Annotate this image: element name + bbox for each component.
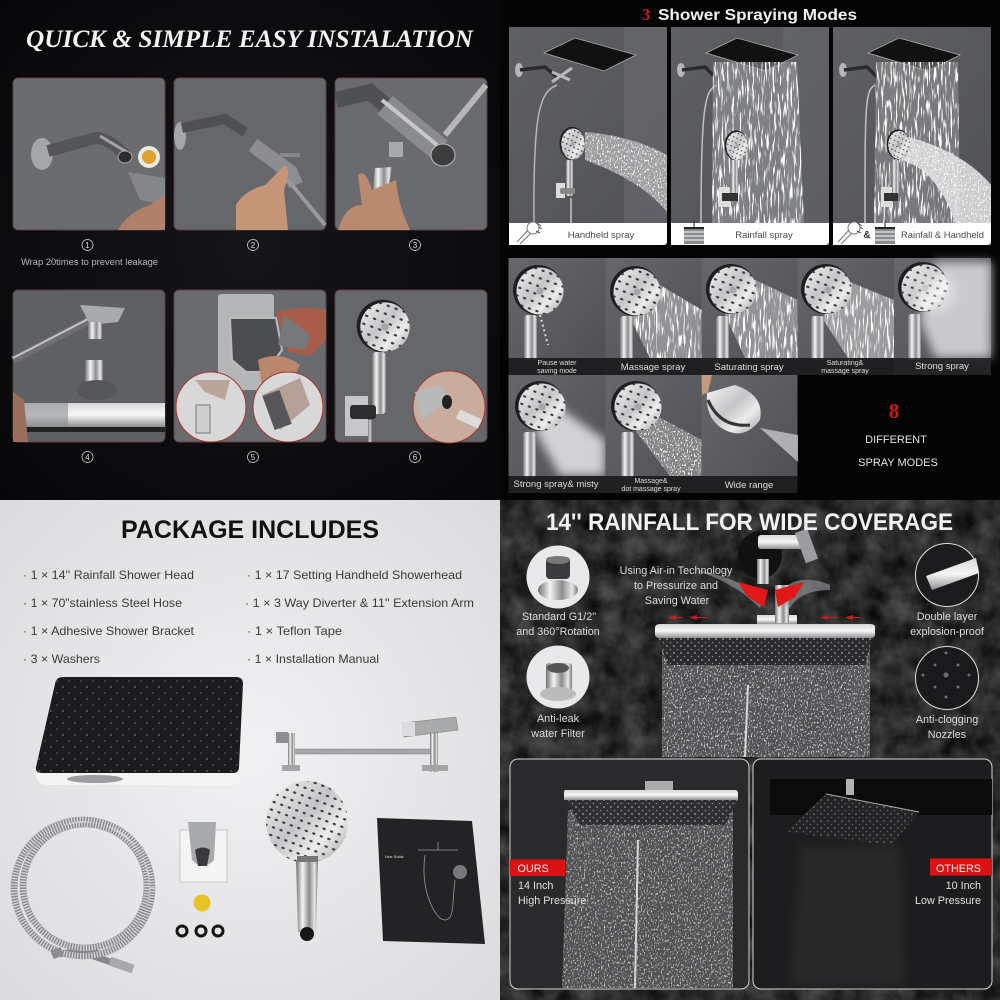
caption: handheld spray	[509, 222, 667, 245]
feature: water filter	[526, 646, 590, 740]
step 3 photo: connect hose	[335, 78, 487, 230]
panel: package includes	[0, 500, 500, 1000]
heading: 3 shower spraying modes: 3	[642, 5, 650, 24]
feature: water filter: Anti-leak	[537, 713, 580, 725]
list: left column: · 1 × Adhesive Shower Bracket	[23, 624, 195, 638]
list: right column: · 1 × Installation Manual	[247, 652, 379, 666]
callout: 8 different spray modes: 8	[889, 399, 899, 423]
caption: rainfall and handheld	[833, 221, 991, 245]
text: air-in technology: Using Air-in Technology	[620, 565, 733, 577]
step 1 number	[82, 240, 93, 250]
step 5 number	[248, 452, 258, 462]
caption: Strong spray& misty	[514, 479, 599, 490]
heading: 14 inch rainfall: 14'' RAINFALL FOR WIDE COVERAGE	[546, 509, 953, 536]
arrows: air flow left	[668, 615, 707, 620]
step 4 number	[82, 452, 93, 462]
inset: press bracket	[253, 372, 323, 442]
caption: Wide range	[725, 480, 773, 491]
caption: rainfall and handheld: Rainfall & Handheld	[901, 230, 984, 241]
step 5 number: 5	[251, 453, 256, 462]
step 2 number: 2	[251, 241, 256, 250]
text: 10 inch low pressure: 10 Inch	[946, 880, 981, 892]
step 3 number: 3	[413, 241, 418, 250]
comparison: ours	[510, 759, 749, 989]
badge: ours: OURS	[518, 863, 549, 875]
product: 14 inch rain shower head	[35, 677, 243, 785]
heading: package includes: PACKAGE INCLUDES	[121, 516, 379, 544]
feature: G1/2 connector: and 360°Rotation	[516, 626, 600, 638]
text: air-in technology: Saving Water	[645, 595, 710, 607]
arrows: air flow right	[820, 615, 860, 620]
step 6 number: 6	[413, 453, 418, 462]
feature: anti-clogging nozzles: Nozzles	[928, 729, 967, 741]
text: 14 inch high pressure	[518, 880, 586, 907]
spray mode: saturating	[702, 258, 798, 375]
step 1 number: 1	[85, 241, 90, 250]
caption	[508, 358, 606, 375]
feature: anti-clogging nozzles	[916, 646, 978, 741]
feature: water filter: water Filter	[530, 728, 585, 740]
step 4 photo: mount rain head	[13, 290, 165, 442]
product: instruction manual	[377, 818, 485, 944]
caption: Pause water	[538, 360, 577, 367]
list: left column	[23, 568, 195, 666]
callout: 8 different spray modes: DIFFERENT	[865, 434, 927, 446]
step 3 number	[410, 240, 420, 250]
caption: dot massage spray	[621, 486, 681, 493]
caption: Saturating&	[827, 360, 864, 367]
feature: double layer: Double layer	[917, 611, 978, 623]
step 2 photo: attach diverter	[174, 78, 326, 230]
product: adhesive bracket	[180, 822, 227, 882]
spray mode: saturating and massage	[798, 258, 894, 375]
panel: 14 inch rainfall wide coverage	[500, 500, 1000, 1000]
panel: quick and simple installation	[0, 0, 500, 500]
product: washers	[177, 926, 223, 936]
heading: 3 shower spraying modes: Shower Spraying Modes	[658, 7, 857, 24]
spray mode: pause water	[508, 258, 606, 375]
step 6 photo: handheld placed	[335, 290, 487, 443]
product: handheld shower head	[266, 781, 348, 941]
diverter with air inlet arrows	[695, 529, 830, 624]
list: left column: · 3 × Washers	[23, 652, 100, 666]
badge: others: OTHERS	[936, 863, 981, 875]
step 4 number: 4	[85, 453, 90, 462]
product: instruction manual: User Guide	[385, 855, 404, 859]
feature: double layer	[910, 544, 985, 638]
list: left column: · 1 × 14'' Rainfall Shower Head	[23, 568, 194, 582]
list: right column: · 1 × 17 Setting Handheld Showerhead	[247, 568, 462, 582]
icon: air-in arrows	[695, 570, 830, 608]
mode: rainfall spray	[671, 27, 829, 245]
caption: rainfall spray: Rainfall spray	[735, 230, 793, 241]
product: stainless hose	[14, 820, 152, 969]
list: left column: · 1 × 70”stainless Steel Hose	[23, 596, 182, 610]
step 6 number	[410, 452, 420, 462]
list: right column: · 1 × 3 Way Diverter & 11'' Extension Arm	[245, 596, 474, 610]
feature: G1/2 connector: Standard G1/2"	[522, 611, 596, 623]
text: air-in technology: to Pressurize and	[634, 580, 718, 592]
inset: insert washer	[413, 371, 485, 443]
inset: peel adhesive	[176, 372, 246, 442]
callout: 8 different spray modes	[858, 399, 938, 469]
step 1 note: Wrap 20times to prevent leakage	[21, 257, 158, 268]
step 5 photo: adhesive bracket	[174, 290, 326, 442]
callout: 8 different spray modes: SPRAY MODES	[858, 457, 938, 469]
product: teflon tape	[194, 894, 210, 912]
step 1 photo: wrap tape on arm	[13, 78, 165, 230]
spray mode: wide range	[702, 375, 798, 493]
title: installation: QUICK & SIMPLE EASY INSTALATION	[26, 26, 474, 53]
caption: rainfall and handheld: &	[863, 230, 871, 241]
caption: Saturating spray	[714, 362, 784, 373]
caption	[798, 358, 894, 375]
panel: spraying modes	[500, 0, 1000, 500]
caption: Strong spray	[915, 361, 969, 372]
spray mode: massage	[606, 258, 702, 375]
text: 10 inch low pressure	[915, 880, 981, 907]
main shower head and rainfall	[655, 624, 875, 757]
spray mode: strong	[894, 258, 991, 375]
caption: rainfall spray	[671, 221, 829, 245]
list: right column: · 1 × Teflon Tape	[247, 624, 342, 638]
product: diverter and extension arm	[276, 717, 458, 772]
caption: Massage&	[634, 478, 668, 485]
caption: handheld spray: Handheld spray	[568, 230, 635, 241]
text: air-in technology	[620, 565, 733, 607]
spray mode: massage and dot massage	[606, 375, 702, 493]
list: right column	[245, 568, 474, 666]
caption: massage spray	[821, 368, 869, 375]
comparison: others	[753, 759, 992, 989]
feature: double layer: explosion-proof	[910, 626, 985, 638]
feature: G1/2 connector	[516, 546, 600, 638]
badge: others	[930, 858, 992, 876]
caption	[606, 476, 702, 493]
feature: anti-clogging nozzles: Anti-clogging	[916, 714, 978, 726]
text: 14 inch high pressure: High Pressure	[518, 895, 586, 907]
caption: saving mode	[537, 368, 577, 375]
text: 10 inch low pressure: Low Pressure	[915, 895, 981, 907]
mode: rainfall and handheld	[833, 27, 991, 245]
text: 14 inch high pressure: 14 Inch	[518, 880, 553, 892]
step 2 number	[248, 240, 258, 250]
badge: ours	[510, 860, 565, 876]
mode: handheld spray	[509, 27, 667, 245]
spray mode: strong and misty	[508, 375, 606, 493]
caption: Massage spray	[621, 362, 685, 373]
